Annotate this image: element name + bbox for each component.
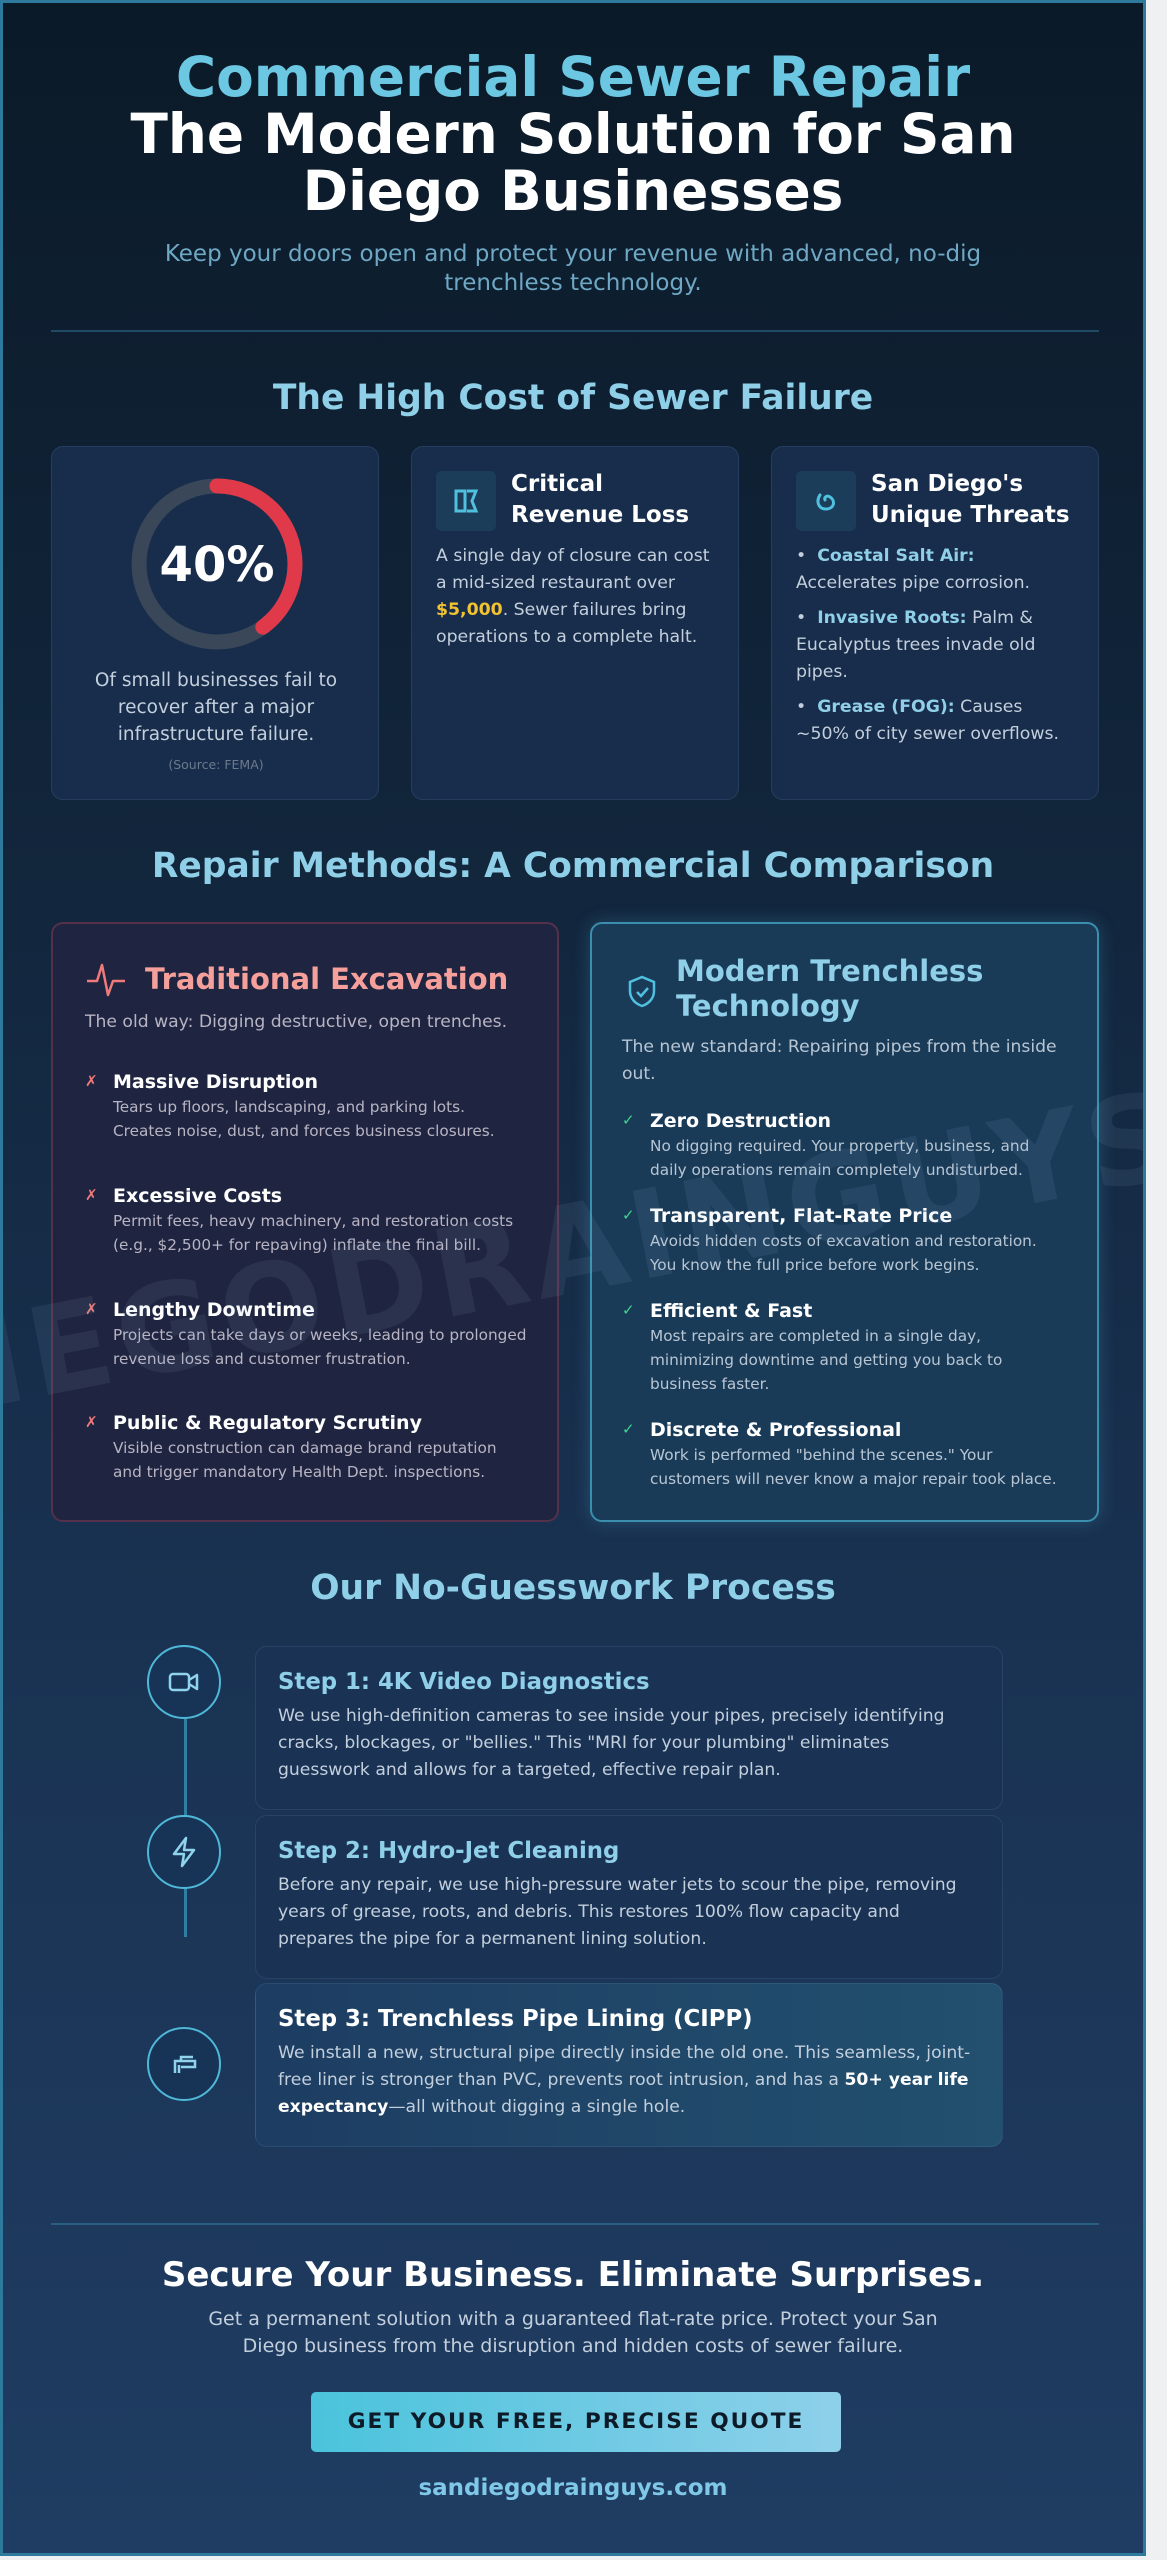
title: Commercial Sewer Repair <box>176 45 970 109</box>
CTA heading: Secure Your Business. Eliminate Surprises. <box>162 2255 984 2295</box>
icon: money <box>436 471 496 531</box>
item: ✓ <box>622 1420 635 1438</box>
donut chart: 40% <box>160 537 274 593</box>
item <box>85 1412 497 1481</box>
item <box>85 1071 495 1140</box>
item: Lengthy Downtime <box>113 1299 315 1321</box>
item <box>622 1419 1057 1488</box>
item: ✓ <box>622 1111 635 1129</box>
card title: San Diego's <box>871 471 1023 497</box>
step 3: Step 3: Trenchless Pipe Lining (CIPP) <box>278 2006 753 2032</box>
step 2: Step 2: Hydro-Jet Cleaning <box>278 1838 619 1864</box>
item: ✗ <box>85 1413 98 1431</box>
step 2 <box>255 1815 1003 1979</box>
item <box>85 1299 526 1368</box>
item: Excessive Costs <box>113 1185 282 1207</box>
item: Permit fees, heavy machinery, and restoration costs (e.g., $2,500+ for repaving) inflate the final bill. <box>113 1212 513 1254</box>
step 1 <box>255 1646 1003 1810</box>
item: ✓ <box>622 1206 635 1224</box>
item <box>622 1205 1037 1274</box>
source: (Source: FEMA) <box>168 757 264 772</box>
item: ✗ <box>85 1186 98 1204</box>
CTA button: GET YOUR FREE, PRECISE QUOTE <box>348 2409 804 2434</box>
step 1: Step 1: 4K Video Diagnostics <box>278 1669 650 1695</box>
item: Visible construction can damage brand reputation and trigger mandatory Health Dept. inspections. <box>113 1439 497 1481</box>
panel subtitle: The new standard: Repairing pipes from the inside out. <box>622 1037 1057 1084</box>
title: Diego Businesses <box>303 159 843 223</box>
item: ✗ <box>85 1072 98 1090</box>
panel title <box>676 954 983 1023</box>
CTA text: Get a permanent solution with a guaranteed flat-rate price. Protect your San Diego business from the disruption and hidden costs of sewer failure. <box>208 2308 938 2357</box>
card title <box>511 471 689 528</box>
icon: shield <box>628 976 656 1008</box>
threats list: • Invasive Roots: Palm & Eucalyptus trees invade old pipes. <box>796 608 1035 682</box>
card title: Unique Threats <box>871 502 1070 528</box>
threats list: • Grease (FOG): Causes ~50% of city sewer overflows. <box>796 697 1059 744</box>
heading: repair methods: Repair Methods: A Commercial Comparison <box>152 846 994 886</box>
item: ✗ <box>85 1300 98 1318</box>
item: Tears up floors, landscaping, and parking lots. Creates noise, dust, and forces business closures. <box>113 1098 495 1140</box>
card: revenue loss <box>411 446 739 800</box>
step 2: Before any repair, we use high-pressure water jets to scour the pipe, removing years of grease, roots, and debris. This restores 100% flow capacity and prepares the pipe for a permanent lining solution. <box>278 1875 957 1949</box>
item: Zero Destruction <box>650 1110 831 1132</box>
item: ✓ <box>622 1301 635 1319</box>
subtitle: Keep your doors open and protect your revenue with advanced, no-dig trenchless technology. <box>165 241 981 296</box>
heading: process: Our No-Guesswork Process <box>310 1568 836 1608</box>
item <box>622 1110 1029 1179</box>
step 1: We use high-definition cameras to see inside your pipes, precisely identifying cracks, blockages, or "bellies." This "MRI for your plumbing" eliminates guesswork and allows for a targeted, effective repair plan. <box>278 1706 945 1780</box>
card body: A single day of closure can cost a mid-sized restaurant over $5,000. Sewer failures bring operations to a complete halt. <box>436 546 709 647</box>
card title: Revenue Loss <box>511 502 689 528</box>
item: Public & Regulatory Scrutiny <box>113 1412 422 1434</box>
item: Transparent, Flat-Rate Price <box>650 1205 952 1227</box>
card: unique threats <box>771 446 1099 800</box>
panel title: Modern Trenchless <box>676 954 983 988</box>
threats list <box>796 546 1059 744</box>
timeline line <box>184 1719 187 1937</box>
title: The Modern Solution for San <box>131 102 1015 166</box>
panel title: Traditional Excavation <box>145 962 508 996</box>
heading: high cost: The High Cost of Sewer Failure <box>273 378 873 418</box>
title <box>130 45 1015 223</box>
icon: camera <box>147 1645 221 1719</box>
item <box>85 1185 513 1254</box>
icon: drop <box>796 471 856 531</box>
panel subtitle: The old way: Digging destructive, open trenches. <box>85 1012 507 1032</box>
panel: traditional <box>51 922 559 1522</box>
item: Massive Disruption <box>113 1071 318 1093</box>
item: Discrete & Professional <box>650 1419 901 1441</box>
item: Most repairs are completed in a single day, minimizing downtime and getting you back to business faster. <box>650 1327 1002 1393</box>
panel title: Technology <box>676 989 860 1023</box>
website url: sandiegodrainguys.com <box>418 2475 728 2501</box>
panel: trenchless <box>590 922 1099 1522</box>
item: Work is performed "behind the scenes." Your customers will never know a major repair took place. <box>650 1446 1057 1488</box>
item: No digging required. Your property, business, and daily operations remain completely undisturbed. <box>650 1137 1029 1179</box>
item: Avoids hidden costs of excavation and restoration. You know the full price before work begins. <box>650 1232 1037 1274</box>
icon: paint roller <box>147 2027 221 2101</box>
item <box>622 1300 1002 1393</box>
donut chart <box>132 478 302 650</box>
icon: bolt <box>147 1815 221 1889</box>
item: Efficient & Fast <box>650 1300 812 1322</box>
step 3 <box>255 1983 1003 2147</box>
icon: pulse <box>87 964 125 996</box>
item: Projects can take days or weeks, leading to prolonged revenue loss and customer frustration. <box>113 1326 526 1368</box>
card: 40% stat <box>51 446 379 800</box>
CTA button <box>311 2392 841 2452</box>
card title: Critical <box>511 471 603 497</box>
step 3: We install a new, structural pipe directly inside the old one. This seamless, joint-free liner is stronger than PVC, prevents root intrusion, and has a 50+ year life expectancy—all without digging a single hole. <box>278 2043 970 2117</box>
stat text: Of small businesses fail to recover after a major infrastructure failure. <box>95 670 337 745</box>
card title <box>871 471 1070 528</box>
threats list: • Coastal Salt Air: Accelerates pipe corrosion. <box>796 546 1030 593</box>
